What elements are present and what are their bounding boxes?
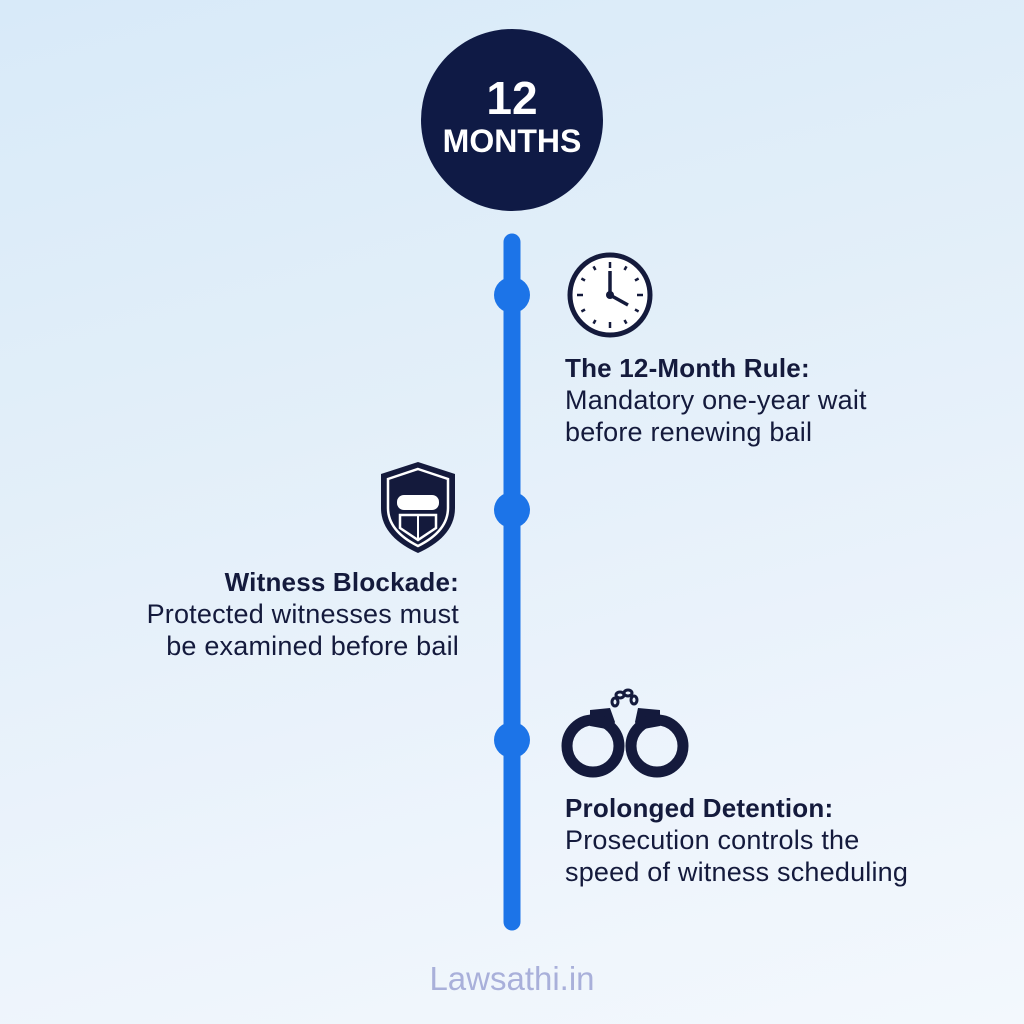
badge: 12 months [421, 29, 603, 211]
text: prolonged detention: speed of witness scheduling [565, 857, 908, 887]
text: prolonged detention: Prolonged Detention: [565, 793, 833, 823]
footer: brand: Lawsathi.in [429, 960, 595, 997]
text: 12-month rule: Mandatory one-year wait [565, 385, 867, 415]
text: 12-month rule: The 12-Month Rule: [565, 353, 810, 383]
text: witness blockade [147, 567, 459, 661]
text: 12-month rule: before renewing bail [565, 417, 812, 447]
text: prolonged detention [565, 793, 908, 887]
text: prolonged detention: Prosecution controls the [565, 825, 859, 855]
icon: handcuffs [562, 688, 688, 778]
text: witness blockade: Protected witnesses must [147, 599, 459, 629]
text: witness blockade: Witness Blockade: [225, 567, 459, 597]
text: witness blockade: be examined before bail [166, 631, 459, 661]
badge: 12 months: 12 [486, 72, 538, 124]
text: 12-month rule [565, 353, 867, 447]
icon: shield [381, 462, 455, 553]
badge: 12 months: MONTHS [443, 123, 581, 159]
icon: clock [568, 252, 652, 338]
